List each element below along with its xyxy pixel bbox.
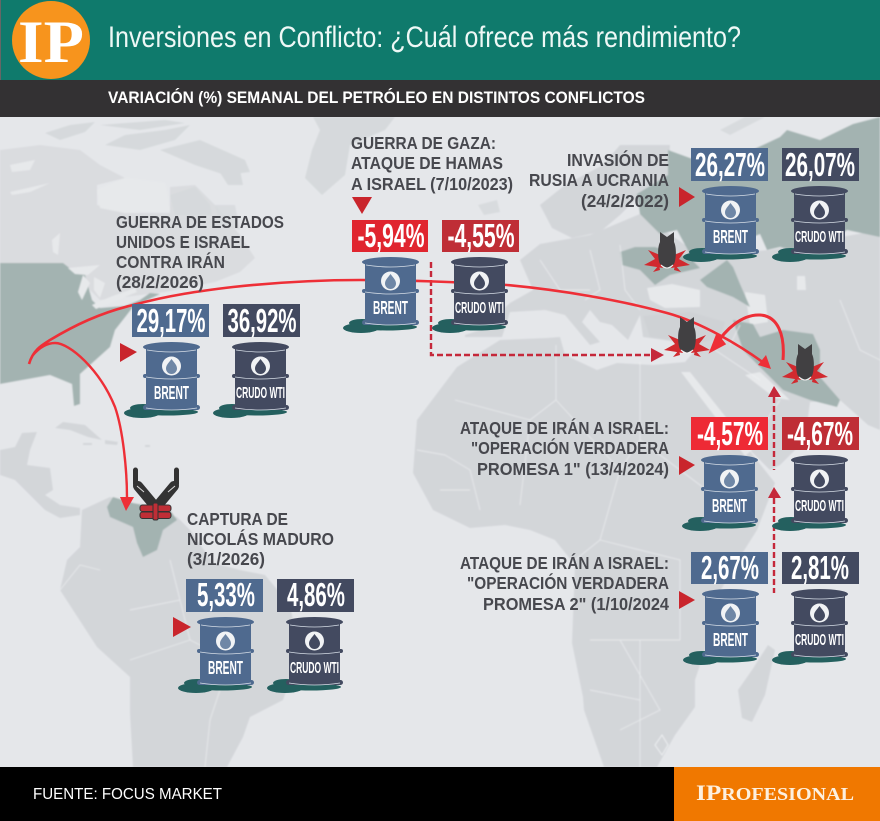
barrel WTI bbox=[213, 342, 289, 418]
heading: CONTRA IRÁN bbox=[116, 252, 225, 272]
footer bbox=[0, 767, 880, 821]
barrel Brent: BRENT bbox=[713, 630, 748, 650]
arrow: USA to Iran bbox=[29, 280, 771, 369]
Scandinavia bbox=[540, 145, 670, 238]
logo IP bbox=[12, 1, 90, 79]
barrel WTI: CRUDO WTI bbox=[236, 385, 285, 402]
heading: A ISRAEL (7/10/2023) bbox=[351, 174, 513, 194]
heading: PROMESA 2" (1/10/2024 bbox=[483, 594, 669, 614]
Europe and Asia bbox=[465, 214, 880, 470]
value WTI: 36,92% bbox=[228, 302, 296, 339]
value Brent bbox=[352, 217, 428, 254]
heading: ATAQUE DE IRÁN A ISRAEL: bbox=[460, 418, 669, 438]
heading: INVASIÓN DE bbox=[567, 150, 669, 170]
heading: CAPTURA DE bbox=[187, 509, 288, 529]
barrel Brent bbox=[682, 455, 758, 531]
heading: (28/2/2026) bbox=[116, 272, 204, 292]
heading bbox=[351, 133, 513, 194]
barrel WTI bbox=[432, 257, 508, 333]
source: FUENTE: FOCUS MARKET bbox=[33, 786, 222, 803]
value WTI bbox=[223, 302, 300, 339]
barrel Brent: BRENT bbox=[713, 227, 748, 247]
barrel Brent bbox=[178, 617, 254, 693]
heading bbox=[116, 212, 284, 292]
heading: (3/1/2026) bbox=[187, 549, 265, 569]
barrel Brent bbox=[124, 342, 200, 418]
barrel WTI: CRUDO WTI bbox=[290, 660, 339, 677]
panel: Guerra de Estados Unidos e Israel contra Irán bbox=[116, 212, 300, 418]
arrow: dashed to Iran bbox=[768, 386, 781, 470]
heading bbox=[187, 509, 334, 569]
heading: UNIDOS E ISRAEL bbox=[116, 232, 250, 252]
barrel WTI bbox=[267, 617, 343, 693]
subtitle bar: VARIACIÓN (%) SEMANAL DEL PETRÓLEO EN DISTINTOS CONFLICTOS bbox=[108, 88, 645, 107]
header band bbox=[0, 0, 880, 117]
panel: Captura de Nicolás Maduro bbox=[173, 509, 354, 693]
value Brent bbox=[691, 549, 768, 586]
marker bbox=[173, 617, 191, 637]
Central America bbox=[0, 432, 80, 518]
Caribbean bbox=[55, 422, 102, 440]
barrel Brent bbox=[683, 589, 759, 665]
Great Lakes bbox=[68, 265, 100, 275]
barrel Brent: BRENT bbox=[154, 383, 189, 403]
Africa bbox=[413, 337, 775, 767]
heading: GUERRA DE ESTADOS bbox=[116, 212, 284, 232]
Arctic islands bbox=[45, 122, 95, 140]
panel: Promesa 1 bbox=[460, 415, 859, 531]
Hudson patches bbox=[97, 178, 170, 213]
value Brent: 29,17% bbox=[136, 302, 206, 339]
value WTI: -4,55% bbox=[448, 217, 514, 254]
marker bbox=[679, 187, 695, 207]
Madagascar bbox=[738, 645, 775, 722]
arrow: dashed Gaza to Israel bbox=[431, 262, 664, 362]
value Brent bbox=[691, 146, 768, 183]
panel: Invasión de Rusia a Ucrania bbox=[529, 146, 859, 262]
barrel WTI: CRUDO WTI bbox=[455, 300, 504, 317]
heading: ATAQUE DE IRÁN A ISRAEL: bbox=[460, 553, 669, 573]
arrow: Iran to Israel bbox=[710, 315, 783, 360]
logo IP: IP bbox=[18, 9, 84, 75]
heading: GUERRA DE GAZA: bbox=[351, 133, 496, 153]
Black Sea and Caspian bbox=[647, 284, 700, 308]
title: Inversiones en Conflicto: ¿Cuál ofrece más rendimiento? bbox=[108, 21, 741, 54]
value WTI bbox=[782, 549, 859, 586]
value WTI: 4,86% bbox=[287, 576, 345, 613]
value Brent bbox=[186, 576, 263, 613]
brand: IPROFESIONAL bbox=[696, 780, 854, 805]
Venezuela bbox=[107, 497, 177, 557]
Ukraine bbox=[620, 247, 700, 285]
value Brent bbox=[691, 415, 768, 452]
barrel Brent: BRENT bbox=[712, 496, 747, 516]
Russia bbox=[637, 117, 880, 256]
value Brent bbox=[132, 302, 209, 339]
heading bbox=[529, 150, 669, 211]
Greenland bbox=[305, 117, 395, 195]
icon: handcuffed hands bbox=[136, 470, 176, 520]
barrel WTI bbox=[772, 589, 848, 665]
USA bbox=[0, 263, 160, 406]
heading: "OPERACIÓN VERDADERA bbox=[467, 573, 669, 593]
arrow: USA to Venezuela bbox=[33, 343, 134, 511]
barrel WTI bbox=[772, 186, 848, 262]
arrow: dashed second attack bbox=[768, 487, 781, 593]
value WTI bbox=[277, 576, 354, 613]
Iran bbox=[733, 320, 840, 407]
heading: (24/2/2022) bbox=[581, 191, 669, 211]
Caucasus region bbox=[700, 260, 750, 307]
heading: "OPERACIÓN VERDADERA bbox=[471, 438, 669, 458]
value WTI bbox=[442, 217, 519, 254]
South America bbox=[60, 497, 297, 767]
value Brent: 26,27% bbox=[695, 146, 765, 183]
panel: Promesa 2 bbox=[460, 549, 859, 665]
heading bbox=[460, 553, 669, 614]
barrel Brent bbox=[343, 257, 419, 333]
panel: Guerra de Gaza bbox=[343, 133, 519, 333]
value Brent: -5,94% bbox=[358, 217, 424, 254]
icon: bomb Israel bbox=[664, 317, 710, 357]
subtitle bar bbox=[0, 80, 880, 117]
Iceland and UK bbox=[478, 200, 500, 215]
Canada bbox=[0, 145, 255, 300]
heading: ATAQUE DE HAMAS bbox=[351, 153, 503, 173]
marker bbox=[679, 456, 695, 475]
icon: bomb Ucrania bbox=[644, 232, 690, 272]
value Brent: 5,33% bbox=[197, 576, 255, 613]
icon: bomb Iran bbox=[782, 344, 828, 384]
marker bbox=[352, 197, 372, 214]
value Brent: 2,67% bbox=[701, 549, 759, 586]
heading: RUSIA A UCRANIA bbox=[529, 170, 669, 190]
barrel WTI bbox=[772, 455, 848, 531]
Turkey bbox=[643, 312, 725, 343]
heading bbox=[460, 418, 669, 479]
Quebec bbox=[170, 187, 212, 215]
marker bbox=[120, 343, 137, 362]
barrel Brent bbox=[683, 186, 759, 262]
value Brent: -4,57% bbox=[697, 415, 763, 452]
heading: NICOLÁS MADURO bbox=[187, 529, 334, 549]
heading: PROMESA 1" (13/4/2024) bbox=[477, 459, 669, 479]
marker bbox=[679, 591, 695, 609]
barrel Brent: BRENT bbox=[208, 658, 243, 678]
barrel Brent: BRENT bbox=[373, 298, 408, 318]
